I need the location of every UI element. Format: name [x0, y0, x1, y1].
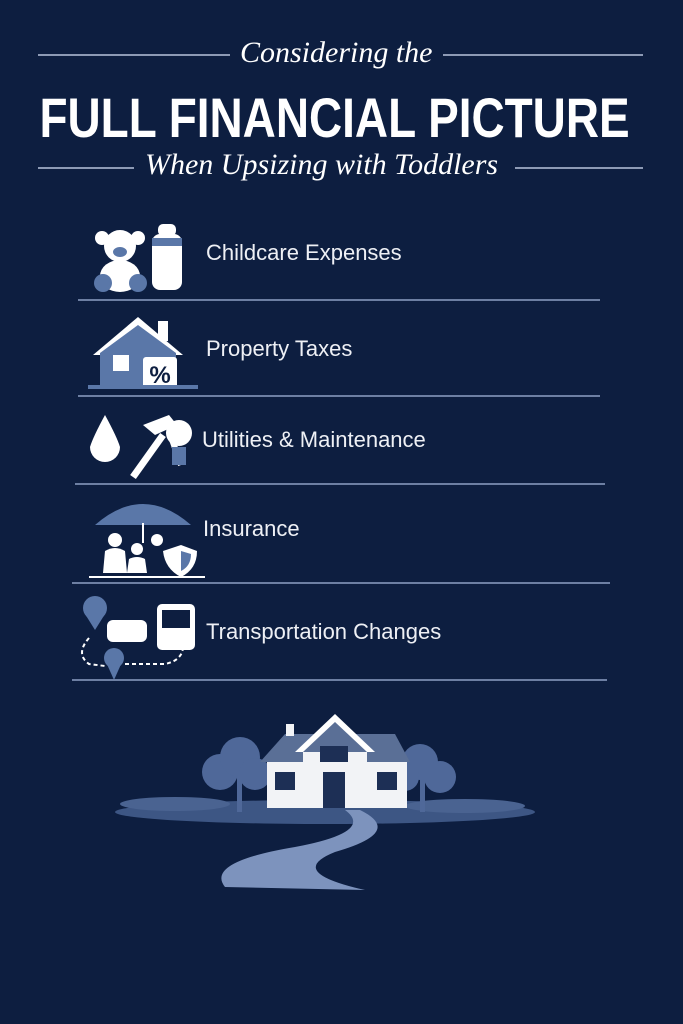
label: Utilities & Maintenance: [202, 427, 426, 452]
icon: pins car bus: [81, 596, 195, 679]
item: transportation: [81, 596, 441, 679]
label: Childcare Expenses: [206, 240, 402, 265]
icon: umbrella family shield: [89, 504, 205, 578]
item: property taxes: [88, 317, 352, 389]
subtitle top: Considering the: [240, 36, 432, 69]
label: Property Taxes: [206, 336, 352, 361]
title: FULL FINANCIAL PICTURE: [39, 86, 630, 149]
label: Transportation Changes: [206, 619, 441, 644]
illustration: house on hill with road and trees: [115, 714, 535, 890]
label: Insurance: [203, 516, 300, 541]
item: insurance: [89, 504, 300, 578]
icon: house with percent: %: [149, 362, 171, 389]
header rules: [38, 54, 230, 56]
subtitle bottom: When Upsizing with Toddlers: [145, 148, 498, 181]
icon: teddy bear and bottle: [94, 224, 182, 292]
item: childcare: [94, 224, 402, 292]
icon: drop, tools, bulb: [90, 415, 192, 479]
icon: house with percent: [88, 317, 198, 389]
item: utilities: [90, 415, 426, 479]
